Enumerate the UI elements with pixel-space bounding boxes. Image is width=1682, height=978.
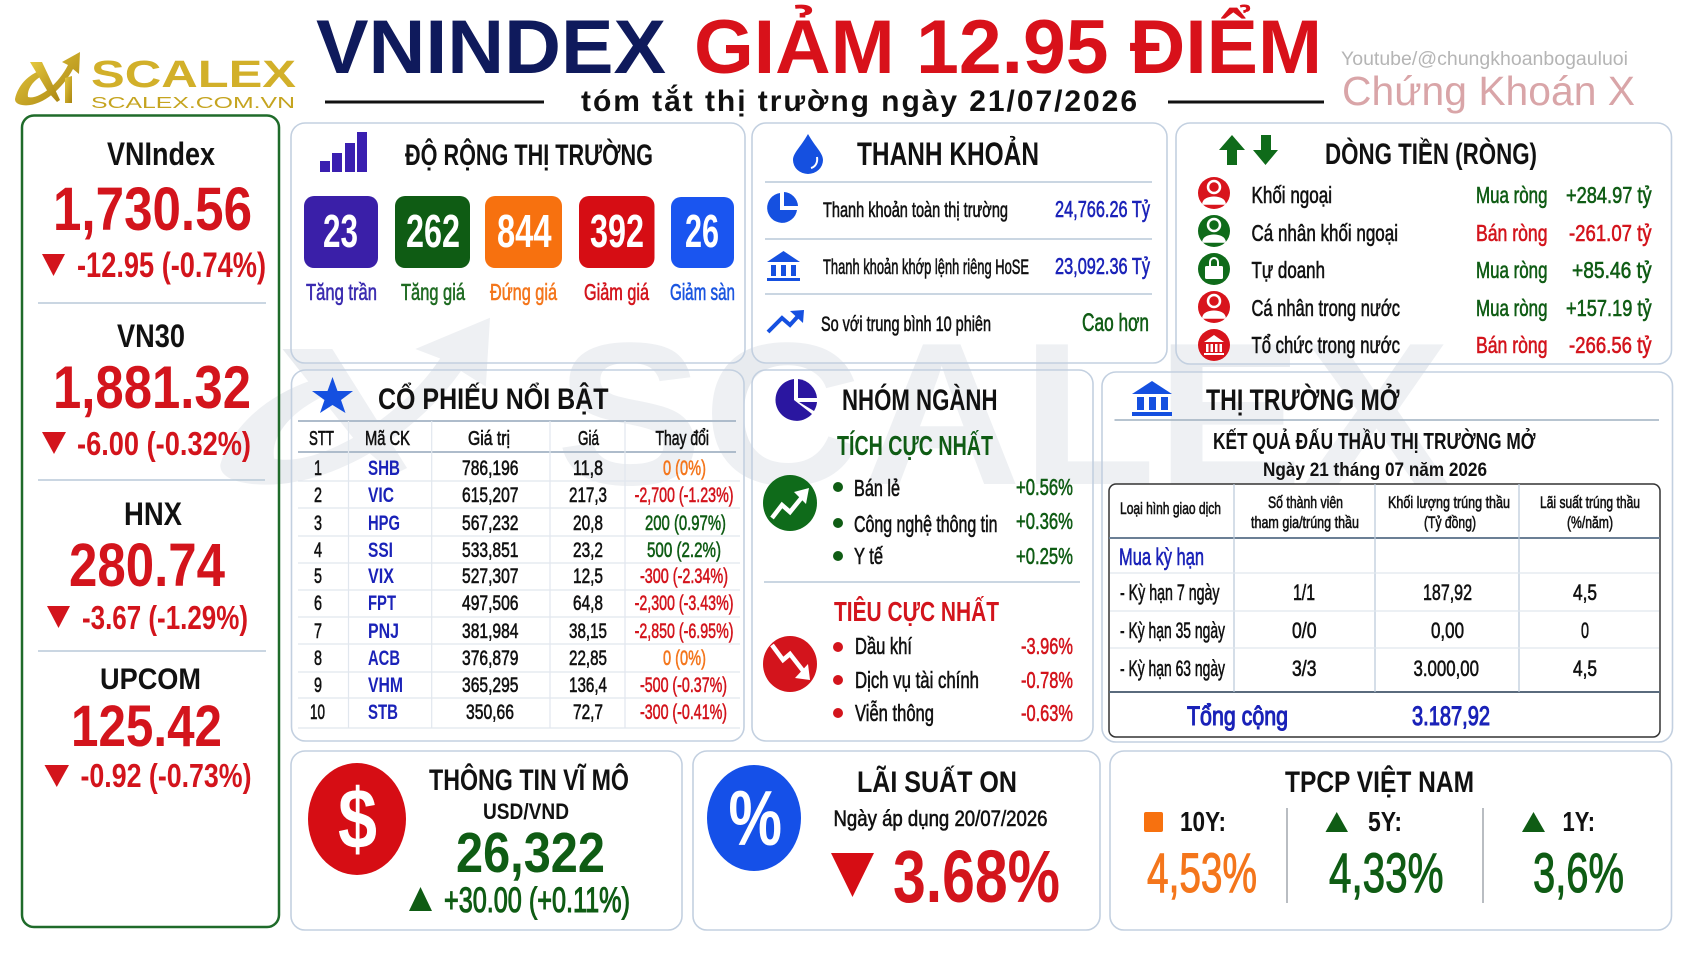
row: total: Tổng cộng — [1187, 701, 1288, 731]
icon: star — [312, 377, 353, 413]
positive sectors: Y tế — [854, 543, 883, 569]
table header: Giá trị — [468, 428, 510, 450]
row 6: FPT — [368, 592, 396, 615]
stat: tăng trần: 23 — [323, 205, 358, 257]
row: total liquidity: Thanh khoản toàn thị trường — [823, 199, 1008, 222]
10Y — [1144, 806, 1257, 904]
auction title: Ngày 21 tháng 07 năm 2026 — [1263, 460, 1487, 481]
row 3: 20,8 — [573, 512, 603, 535]
channel credit: Chứng Khoán X — [1342, 68, 1635, 114]
row label: mua kỳ hạn: Mua kỳ hạn — [1119, 544, 1204, 571]
UPCOM: -0.92 (-0.73%) — [80, 757, 252, 794]
row: 35 days: - Kỳ hạn 35 ngày — [1120, 618, 1225, 643]
row 10: 10 — [310, 701, 325, 724]
row: compared to 10 sessions: So với trung bình 10 phiên — [821, 313, 991, 336]
panel: macro info — [291, 751, 682, 930]
heading: ĐỘ RỘNG THỊ TRƯỜNG — [405, 138, 653, 172]
row 4: 23,2 — [573, 539, 603, 562]
row 5 — [314, 565, 728, 588]
heading: CỔ PHIẾU NỔI BẬT — [378, 382, 608, 416]
icon: dollar — [308, 763, 406, 875]
stat: tăng trần: Tăng trần — [306, 279, 377, 305]
row: tổ chức trong nước — [1198, 329, 1652, 361]
VNIndex: -12.95 (-0.74%) — [77, 246, 266, 285]
row 6: 497,506 — [462, 592, 518, 615]
VN30 — [42, 318, 251, 462]
VN30: -6.00 (-0.32%) — [77, 425, 251, 462]
row 5: 12,5 — [573, 565, 603, 588]
10Y: 4,53% — [1147, 841, 1257, 904]
negative sectors: Dịch vụ tài chính — [855, 667, 979, 693]
row: tự doanh: +85.46 tỷ — [1572, 257, 1652, 283]
row 6: 64,8 — [573, 592, 603, 615]
negative sectors: -0.63% — [1021, 700, 1073, 726]
table header: Loại hình giao dịch — [1120, 499, 1221, 518]
title — [316, 4, 1322, 90]
row 10: STB — [368, 701, 398, 724]
row 2: VIC — [368, 484, 394, 507]
VN30: VN30 — [117, 318, 185, 354]
table — [298, 421, 740, 728]
auction table — [1109, 484, 1660, 737]
stat: giảm sàn: Giảm sàn — [670, 279, 735, 305]
row: compared to 10 sessions: Cao hơn — [1082, 309, 1149, 337]
row 5: 527,307 — [462, 565, 518, 588]
stat: đứng giá: 844 — [497, 205, 552, 257]
row: khối ngoại: +284.97 tỷ — [1566, 182, 1652, 208]
table header: Thay đổi — [656, 428, 709, 450]
row 8: 376,879 — [462, 647, 518, 670]
heading: THÔNG TIN VĨ MÔ — [429, 763, 629, 797]
5Y: 5Y: — [1368, 806, 1402, 837]
negative sectors: Dầu khí — [855, 633, 912, 659]
USD/VND rate: 26,322 — [456, 821, 605, 885]
heading: LÃI SUẤT ON — [857, 765, 1017, 799]
row 4: 500 (2.2%) — [647, 539, 721, 562]
row: tổ chức trong nước: Bán ròng — [1476, 332, 1548, 358]
row 6 — [314, 592, 734, 615]
row: cá nhân trong nước: +157.19 tỷ — [1566, 295, 1652, 321]
row 5: -300 (-2.34%) — [640, 565, 728, 588]
row: cá nhân khối ngoại: Cá nhân khối ngoại — [1252, 220, 1398, 246]
row: HoSE matched liquidity: 23,092.36 Tỷ — [1055, 253, 1150, 279]
row 10: 350,66 — [466, 701, 514, 724]
row 1: SHB — [368, 457, 400, 480]
row 1 — [314, 457, 706, 480]
HNX: 280.74 — [69, 531, 225, 599]
heading: TPCP VIỆT NAM — [1285, 765, 1474, 799]
USD/VND rate: USD/VND — [483, 799, 569, 824]
row 1: 1 — [314, 457, 322, 480]
row: khối ngoại — [1198, 177, 1652, 209]
positive sectors: +0.25% — [1016, 543, 1073, 569]
row: 63 days: 3.000,00 — [1414, 656, 1479, 681]
table header — [1120, 493, 1640, 532]
row: compared to 10 sessions — [768, 309, 1149, 337]
row 3 — [314, 512, 726, 535]
table header: Số thành viên — [1268, 493, 1343, 512]
row: 35 days — [1120, 618, 1589, 643]
row 3: 3 — [314, 512, 322, 535]
row 7: -2,850 (-6.95%) — [635, 620, 734, 643]
row 6: 6 — [314, 592, 322, 615]
row 9: VHM — [368, 674, 403, 697]
panel: net money flow — [1176, 123, 1672, 364]
row: cá nhân trong nước — [1198, 291, 1652, 323]
row: tự doanh: Tự doanh — [1252, 257, 1325, 283]
auction title — [1213, 426, 1536, 481]
row: 7 days: 1/1 — [1293, 580, 1315, 605]
row 3: 200 (0.97%) — [645, 512, 726, 535]
table header — [309, 428, 709, 450]
row 5: VIX — [368, 565, 394, 588]
negative sectors: -3.96% — [1021, 633, 1073, 659]
table header: tham gia/trúng thầu — [1251, 513, 1359, 532]
HNX: HNX — [124, 496, 183, 532]
row 4: SSI — [368, 539, 393, 562]
row: total liquidity — [767, 192, 1150, 223]
row 1: 11,8 — [573, 457, 603, 480]
stat: đứng giá — [485, 196, 562, 305]
logo: SCALEX.COM.VN — [91, 95, 295, 112]
row: cá nhân khối ngoại: Bán ròng — [1476, 220, 1548, 246]
row 2 — [314, 484, 734, 507]
positive sectors: Công nghệ thông tin — [854, 511, 998, 537]
row: 63 days: 4,5 — [1573, 656, 1597, 681]
row 9: 365,295 — [462, 674, 518, 697]
panel: market breadth — [291, 123, 745, 363]
1Y: 3,6% — [1533, 841, 1624, 904]
1Y — [1522, 806, 1624, 904]
row 6: -2,300 (-3.43%) — [635, 592, 734, 615]
positive sectors — [763, 430, 1073, 569]
row 7: PNJ — [368, 620, 399, 643]
icon: water drop — [793, 134, 823, 174]
icon: percent: % — [728, 774, 782, 862]
row: cá nhân khối ngoại: -261.07 tỷ — [1569, 220, 1652, 246]
negative sectors: -0.78% — [1021, 667, 1073, 693]
table header: Khối lượng trúng thầu — [1388, 493, 1510, 512]
rate value — [831, 835, 1060, 918]
panel: featured stocks — [292, 370, 744, 741]
auction title: KẾT QUẢ ĐẤU THẦU THỊ TRƯỜNG MỞ — [1213, 426, 1536, 454]
row 2: 2 — [314, 484, 322, 507]
negative sectors — [763, 596, 1073, 726]
row: 63 days — [1120, 656, 1597, 681]
panel: government bonds — [1110, 751, 1672, 930]
row 1: 786,196 — [462, 457, 518, 480]
row 8: ACB — [368, 647, 400, 670]
row: tự doanh: Mua ròng — [1476, 257, 1548, 283]
5Y: 4,33% — [1329, 841, 1444, 904]
stat: giảm sàn: 26 — [685, 205, 719, 257]
10Y: 10Y: — [1180, 806, 1226, 837]
row 7: 381,984 — [462, 620, 519, 643]
VNIndex: 1,730.56 — [53, 175, 252, 243]
panel: index summary — [22, 116, 279, 927]
row: khối ngoại: Khối ngoại — [1252, 182, 1332, 208]
stat: tăng giá: 262 — [406, 205, 460, 257]
subtitle — [325, 84, 1324, 118]
row 10: -300 (-0.41%) — [640, 701, 727, 724]
row: tổ chức trong nước: -266.56 tỷ — [1569, 332, 1652, 358]
row: 63 days: 3/3 — [1292, 656, 1316, 681]
row: 35 days: 0 — [1581, 618, 1589, 643]
USD/VND rate — [409, 799, 630, 920]
stat: tăng giá — [395, 196, 470, 305]
USD/VND rate: +30.00 (+0.11%) — [444, 881, 630, 920]
panel: sector groups — [752, 370, 1093, 741]
HNX: -3.67 (-1.29%) — [82, 599, 248, 636]
channel credit: Youtube/@chungkhoanbogauluoi — [1341, 49, 1628, 70]
HNX — [47, 496, 248, 636]
row: 35 days: 0,00 — [1431, 618, 1464, 643]
stat: đứng giá: Đứng giá — [490, 279, 557, 305]
title: VNINDEX — [316, 5, 666, 90]
heading: THANH KHOẢN — [857, 136, 1039, 172]
row 3: 567,232 — [462, 512, 518, 535]
table header: Lãi suất trúng thầu — [1540, 493, 1640, 512]
row 10 — [310, 701, 727, 724]
row 8: 0 (0%) — [663, 647, 706, 670]
watermark — [220, 301, 1450, 528]
table header: Mã CK — [365, 428, 410, 450]
stat: giảm giá — [579, 196, 654, 305]
VNIndex: VNIndex — [107, 136, 215, 172]
row: total: 3.187,92 — [1412, 701, 1490, 731]
row 7: 7 — [314, 620, 322, 643]
stat: giảm sàn — [670, 197, 735, 305]
row 2: -2,700 (-1.23%) — [635, 484, 734, 507]
VN30: 1,881.32 — [53, 354, 251, 421]
row: 63 days: - Kỳ hạn 63 ngày — [1120, 656, 1225, 681]
icon: bars — [320, 132, 367, 172]
5Y — [1326, 806, 1444, 904]
1Y: 1Y: — [1562, 806, 1595, 837]
row 9: -500 (-0.37%) — [640, 674, 727, 697]
positive sectors: +0.56% — [1016, 474, 1073, 500]
row 5: 5 — [314, 565, 322, 588]
title: GIẢM 12.95 ĐIỂM — [694, 4, 1322, 90]
logo — [15, 52, 297, 112]
subtitle: tóm tắt thị trường ngày 21/07/2026 — [581, 84, 1137, 118]
row 9 — [314, 674, 727, 697]
rate value: 3.68% — [893, 835, 1060, 918]
watermark: SCALEX — [556, 301, 1450, 528]
table header: (%/năm) — [1567, 513, 1613, 532]
table header: STT — [309, 428, 334, 450]
row 4: 4 — [314, 539, 322, 562]
row: cá nhân trong nước: Mua ròng — [1476, 295, 1548, 321]
icon: up and down arrows — [1219, 135, 1278, 165]
VNIndex — [42, 136, 266, 285]
row 2: 217,3 — [569, 484, 607, 507]
stat: giảm giá: 392 — [590, 205, 644, 257]
row 3: HPG — [368, 512, 400, 535]
table header: (Tỷ đồng) — [1424, 513, 1476, 532]
row: total — [1187, 701, 1490, 731]
row 7 — [314, 620, 734, 643]
negative sectors: Viễn thông — [855, 700, 934, 726]
row: total liquidity: 24,766.26 Tỷ — [1055, 196, 1150, 222]
logo: SCALEX — [91, 54, 297, 96]
row 9: 136,4 — [569, 674, 607, 697]
row: 35 days: 0/0 — [1292, 618, 1316, 643]
UPCOM — [44, 663, 252, 794]
icon: bank — [1132, 381, 1172, 416]
row 8 — [314, 647, 706, 670]
icon: dollar: $ — [338, 772, 377, 867]
row: 7 days: - Kỳ hạn 7 ngày — [1120, 580, 1220, 605]
row 2: 615,207 — [462, 484, 518, 507]
icon: percent — [707, 765, 801, 871]
positive sectors: Bán lẻ — [854, 475, 900, 501]
row 9: 9 — [314, 674, 322, 697]
row 1: 0 (0%) — [663, 457, 706, 480]
positive sectors: TÍCH CỰC NHẤT — [837, 430, 993, 461]
positive sectors: +0.36% — [1016, 508, 1073, 534]
panel: open market — [1102, 372, 1672, 742]
row 4 — [314, 539, 721, 562]
table header: Giá — [578, 428, 600, 450]
row: cá nhân khối ngoại — [1198, 215, 1652, 247]
stat: tăng giá: Tăng giá — [401, 279, 465, 305]
heading: THỊ TRƯỜNG MỞ — [1206, 383, 1400, 417]
panel: liquidity — [752, 123, 1167, 363]
row: HoSE matched liquidity: Thanh khoản khớp lệnh riêng HoSE — [823, 256, 1029, 279]
heading: DÒNG TIỀN (RÒNG) — [1325, 137, 1537, 171]
row: tự doanh — [1198, 253, 1652, 285]
row: tổ chức trong nước: Tổ chức trong nước — [1252, 332, 1400, 358]
row 7: 38,15 — [569, 620, 607, 643]
panel: overnight rate — [693, 751, 1100, 930]
row 4: 533,851 — [462, 539, 518, 562]
stat: tăng trần — [304, 196, 378, 305]
heading: NHÓM NGÀNH — [842, 383, 998, 417]
stat: giảm giá: Giảm giá — [584, 279, 649, 305]
row: 7 days: 4,5 — [1573, 580, 1597, 605]
effective date: Ngày áp dụng 20/07/2026 — [834, 806, 1048, 831]
row: cá nhân trong nước: Cá nhân trong nước — [1252, 295, 1400, 321]
row: 7 days: 187,92 — [1423, 580, 1472, 605]
UPCOM: 125.42 — [71, 694, 222, 759]
icon: pie chart — [775, 379, 817, 421]
UPCOM: UPCOM — [100, 663, 201, 696]
row: 7 days — [1120, 580, 1597, 605]
row 10: 72,7 — [573, 701, 603, 724]
row: khối ngoại: Mua ròng — [1476, 182, 1548, 208]
negative sectors: TIÊU CỰC NHẤT — [834, 596, 999, 627]
row 8: 8 — [314, 647, 322, 670]
row: HoSE matched liquidity — [767, 251, 1150, 281]
row 8: 22,85 — [569, 647, 607, 670]
